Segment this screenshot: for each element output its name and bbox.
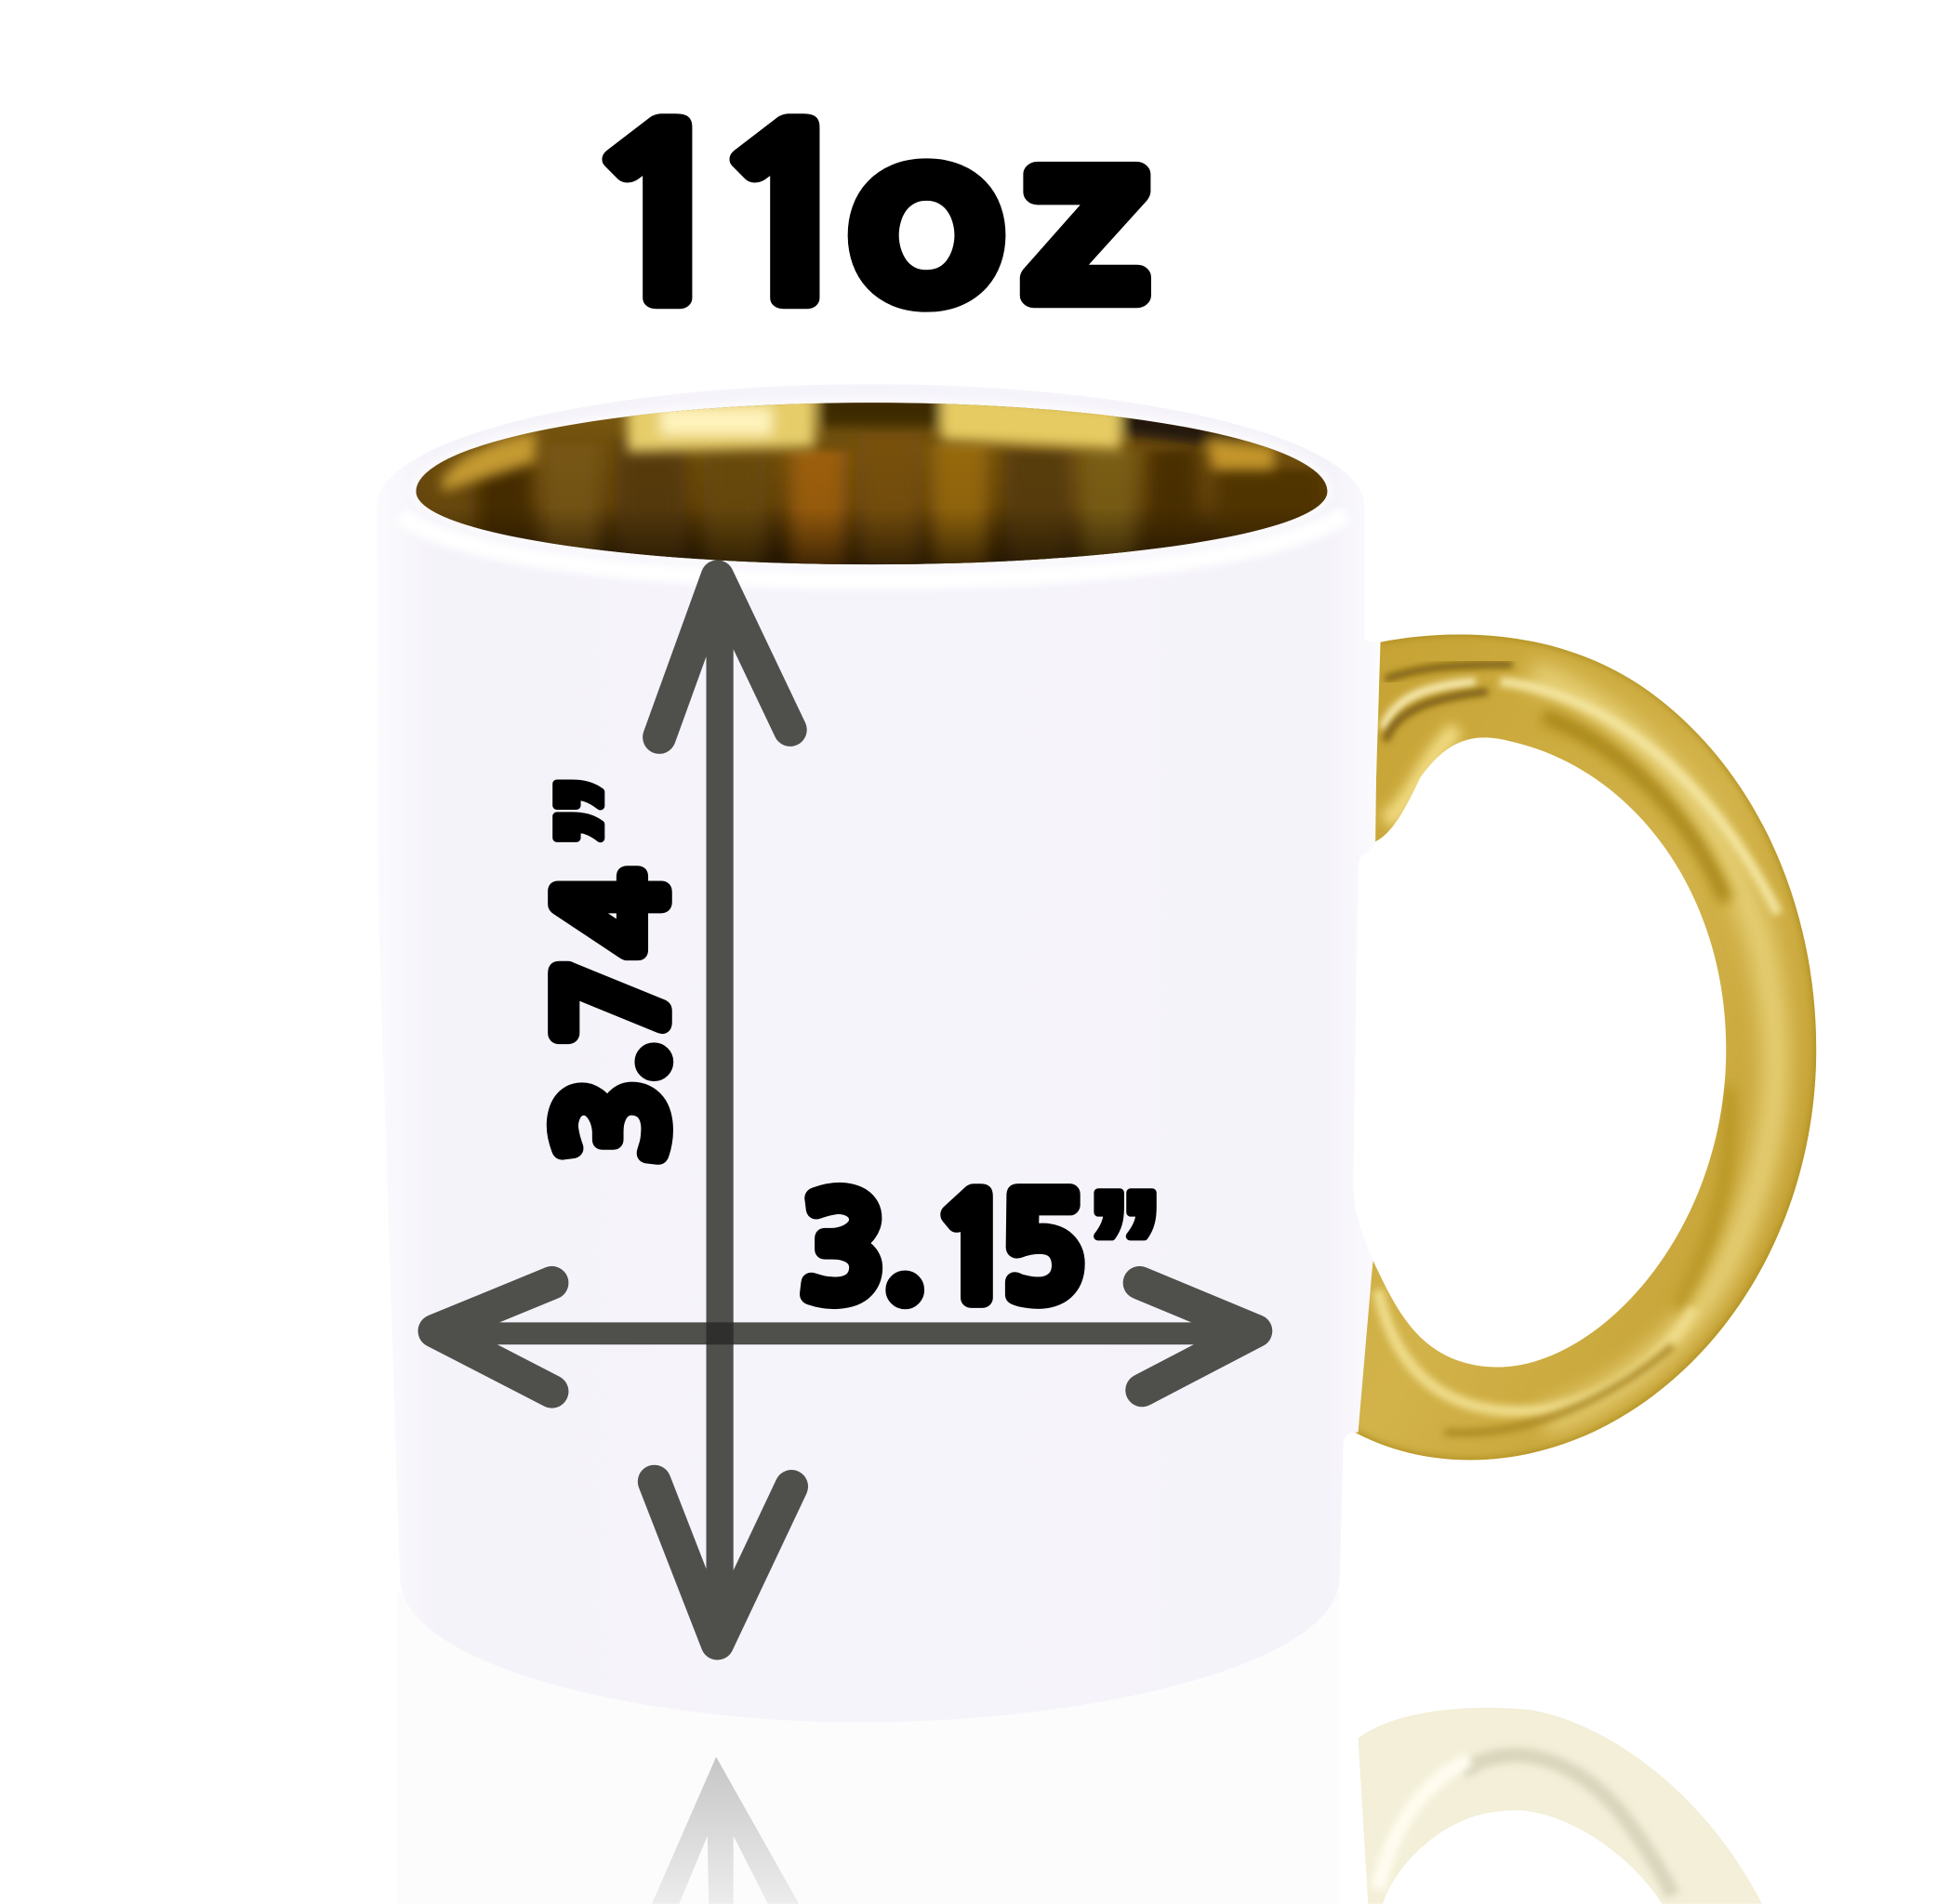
rim: [416, 403, 1327, 564]
bottom arrow head: [655, 1482, 791, 1644]
label: width 3.15 inches: 3.15”: [800, 1160, 1163, 1332]
top arrow head: [659, 576, 790, 737]
title: 11oz: oz: [847, 106, 1147, 334]
reflection: gold handle: [1359, 1708, 1762, 1904]
mug dimensions infographic: [403, 113, 1817, 1904]
top attachment shine: [1386, 665, 1513, 680]
interior highlights: [442, 390, 1274, 492]
darker upper inner band: [1544, 716, 1726, 902]
bottom shine: [1378, 1290, 1694, 1411]
interior bottom shade: [427, 465, 1309, 564]
right arrow head: [1140, 1283, 1255, 1390]
gold handle: [1355, 632, 1819, 1462]
horizontal width arrow: 3.15 inches: [434, 1283, 1257, 1392]
arrow crossing overlap: [707, 1322, 734, 1344]
broad light band: [1531, 673, 1776, 1420]
vertical height arrow: 3.74 inches: [655, 576, 791, 1644]
soft outer rim: [1355, 632, 1819, 1462]
bright reflection: [1500, 681, 1778, 914]
title: 11oz: [576, 101, 1147, 336]
mug body: [377, 384, 1378, 1723]
reflection: arrow: [652, 1757, 799, 1904]
reflection of mug on surface: [398, 1593, 1340, 1904]
left arrow head: [434, 1283, 552, 1392]
title: 11oz: 11: [576, 101, 874, 336]
interior vertical streaks: [417, 439, 1328, 565]
gold interior of mug: [416, 390, 1327, 568]
lower lip highlight: [402, 514, 1346, 580]
label: height 3.74 inches: 3.74”: [524, 773, 696, 1164]
